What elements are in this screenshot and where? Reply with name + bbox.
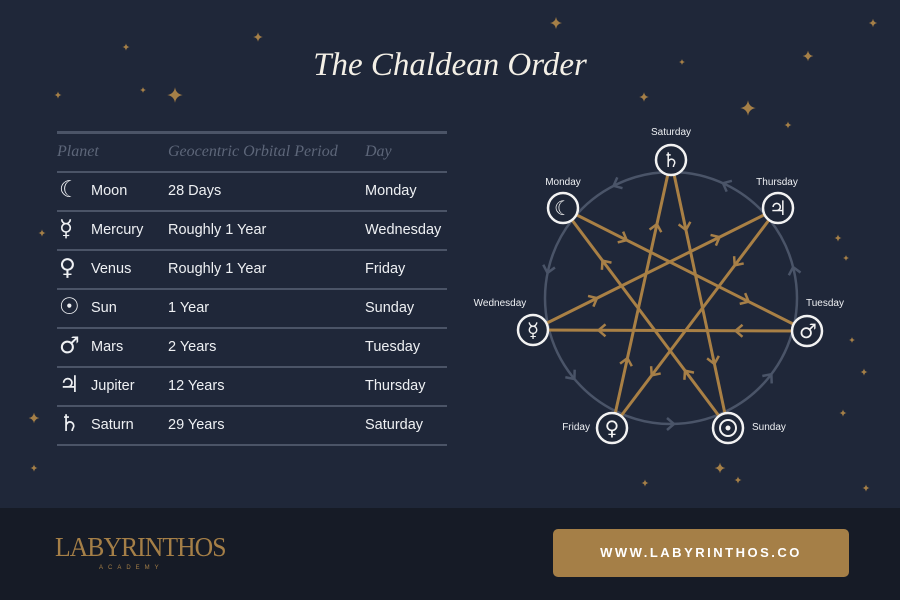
table header	[57, 143, 392, 160]
table header: Planet	[57, 143, 99, 160]
row: moon: Monday	[365, 183, 417, 199]
row: sun: Sun	[91, 300, 117, 316]
row: saturn: Saturday	[365, 417, 423, 433]
title: The Chaldean Order	[313, 47, 587, 83]
row: jupiter: ♃	[59, 372, 80, 398]
row: mercury: ☿	[59, 216, 73, 242]
table	[57, 131, 447, 446]
row: mars: Mars	[91, 339, 123, 355]
row: mars	[59, 333, 420, 359]
heptagram diagram: ♃	[769, 196, 787, 220]
day labels: Saturday	[651, 127, 691, 138]
heptagram diagram: ♂	[799, 319, 817, 343]
row: sun: ☉	[59, 294, 80, 320]
row: sun	[59, 294, 414, 320]
row: moon	[59, 177, 417, 203]
day labels: Sunday	[752, 422, 786, 433]
day labels: Wednesday	[474, 298, 526, 309]
table header: Day	[365, 143, 392, 160]
row: mercury: Wednesday	[365, 222, 441, 238]
row: saturn	[59, 411, 423, 437]
url button: WWW.LABYRINTHOS.CO	[600, 545, 802, 560]
heptagram diagram: ☾	[554, 196, 572, 220]
row: venus: Roughly 1 Year	[168, 261, 266, 277]
row: jupiter	[59, 372, 426, 398]
row: saturn: Saturn	[91, 417, 134, 433]
row: jupiter: Jupiter	[91, 378, 135, 394]
row: venus: ♀	[59, 255, 76, 281]
day labels: Thursday	[756, 177, 798, 188]
row: venus	[59, 255, 406, 281]
day labels: Monday	[545, 177, 581, 188]
table header: Geocentric Orbital Period	[168, 143, 338, 160]
day labels	[474, 127, 844, 433]
row: sun: 1 Year	[168, 300, 209, 316]
row: saturn: ♄	[59, 411, 80, 437]
row: mercury	[59, 216, 442, 242]
logo: ACADEMY	[99, 565, 164, 571]
url button	[553, 529, 849, 577]
row: venus: Venus	[91, 261, 131, 277]
row: jupiter: Thursday	[365, 378, 425, 394]
row: mercury: Mercury	[91, 222, 143, 238]
row: jupiter: 12 Years	[168, 378, 224, 394]
day labels: Tuesday	[806, 298, 844, 309]
row: mars: Tuesday	[365, 339, 420, 355]
row: moon: Moon	[91, 183, 127, 199]
star lines	[533, 160, 807, 428]
orbit circle	[545, 172, 797, 424]
logo: LABYRINTHOS	[55, 532, 226, 562]
row: venus: Friday	[365, 261, 405, 277]
row: moon: ☾	[59, 177, 80, 203]
row: sun: Sunday	[365, 300, 414, 316]
day labels: Friday	[562, 422, 590, 433]
row: mercury: Roughly 1 Year	[168, 222, 266, 238]
row: mars: 2 Years	[168, 339, 216, 355]
planet icons	[518, 145, 822, 443]
heptagram diagram: ☿	[527, 318, 539, 342]
heptagram diagram: ♀	[605, 416, 619, 440]
row: saturn: 29 Years	[168, 417, 224, 433]
heptagram diagram: ♄	[662, 148, 680, 172]
row: mars: ♂	[59, 333, 80, 359]
row: moon: 28 Days	[168, 183, 221, 199]
footer	[0, 508, 900, 600]
